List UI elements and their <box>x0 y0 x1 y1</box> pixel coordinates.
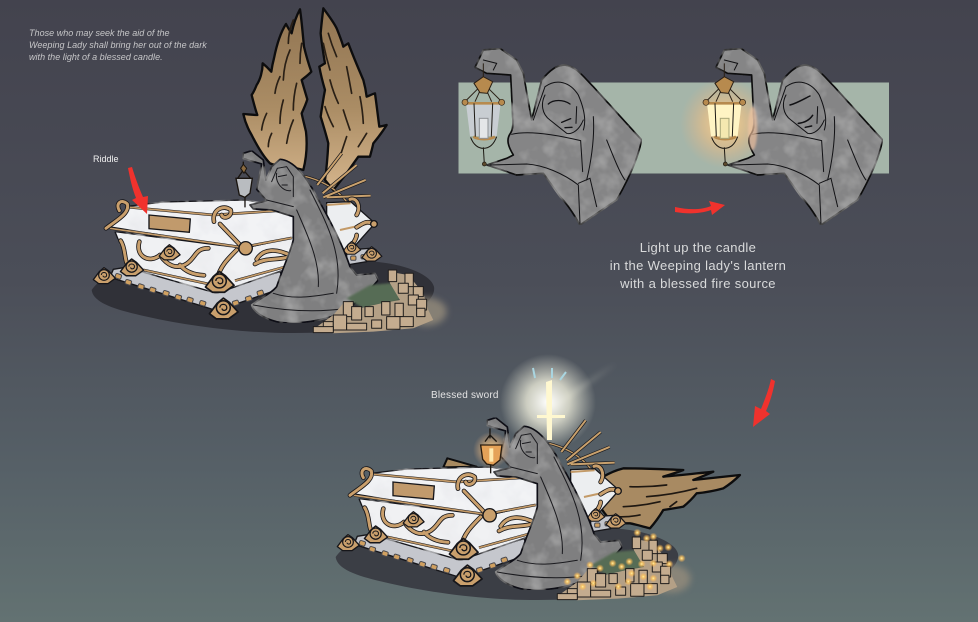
coffin, statue, candles <box>337 418 691 600</box>
lantern candle <box>720 118 729 138</box>
riddle text: Those who may seek the aid of the <box>29 28 170 38</box>
lit small lantern <box>473 428 510 473</box>
panel: pale green band <box>458 82 889 174</box>
lantern ornaments <box>705 103 744 139</box>
candles <box>313 270 433 333</box>
riddle text: Weeping Lady shall bring her out of the dark <box>29 40 207 50</box>
coffin <box>337 466 626 586</box>
lantern fittings <box>462 63 505 166</box>
scene 1: coffin with raised wings <box>92 8 447 333</box>
closeup: unlit lantern statue <box>462 48 642 225</box>
arrow: down to result <box>753 379 775 427</box>
halo rods <box>512 420 615 469</box>
ground shadow <box>336 529 678 600</box>
mist behind candles <box>407 298 447 326</box>
closeup: lit lantern statue <box>680 48 883 225</box>
arrow: riddle <box>128 167 148 214</box>
left wing <box>243 9 311 170</box>
arm glow <box>748 107 757 150</box>
blessed sword glow <box>500 354 617 450</box>
halo rods <box>268 153 371 202</box>
bust <box>475 48 642 225</box>
lantern glass <box>466 103 501 136</box>
arrow: closeup transition <box>675 201 725 215</box>
face unlit <box>548 100 572 128</box>
right wing <box>319 8 387 190</box>
small lantern <box>236 162 252 207</box>
instruction text: in the Weeping lady's lantern <box>610 258 786 273</box>
lantern fittings <box>703 63 746 166</box>
instruction text: Light up the candle <box>640 240 756 255</box>
candles <box>557 537 677 600</box>
scene 2: coffin with sword and fallen wing <box>336 354 740 600</box>
riddle text <box>29 28 207 62</box>
lantern glow <box>680 78 770 168</box>
ground shadow <box>92 262 434 333</box>
lantern glass <box>707 103 742 136</box>
face lit <box>790 96 813 127</box>
moss <box>591 550 652 575</box>
candle flames <box>563 529 686 591</box>
bust <box>716 48 883 225</box>
coffin <box>93 199 382 319</box>
label: blessed sword: Blessed sword <box>431 390 499 401</box>
moss <box>347 283 408 308</box>
instruction text <box>610 240 786 291</box>
mist behind candles <box>651 565 691 593</box>
lantern ornaments <box>464 103 503 139</box>
statue <box>487 418 622 590</box>
fallen wing <box>443 458 740 528</box>
lantern candle <box>479 118 488 138</box>
statue <box>243 151 378 323</box>
label: riddle: Riddle <box>93 154 119 164</box>
riddle text: with the light of a blessed candle. <box>29 52 163 62</box>
instruction text: with a blessed fire source <box>619 276 776 291</box>
